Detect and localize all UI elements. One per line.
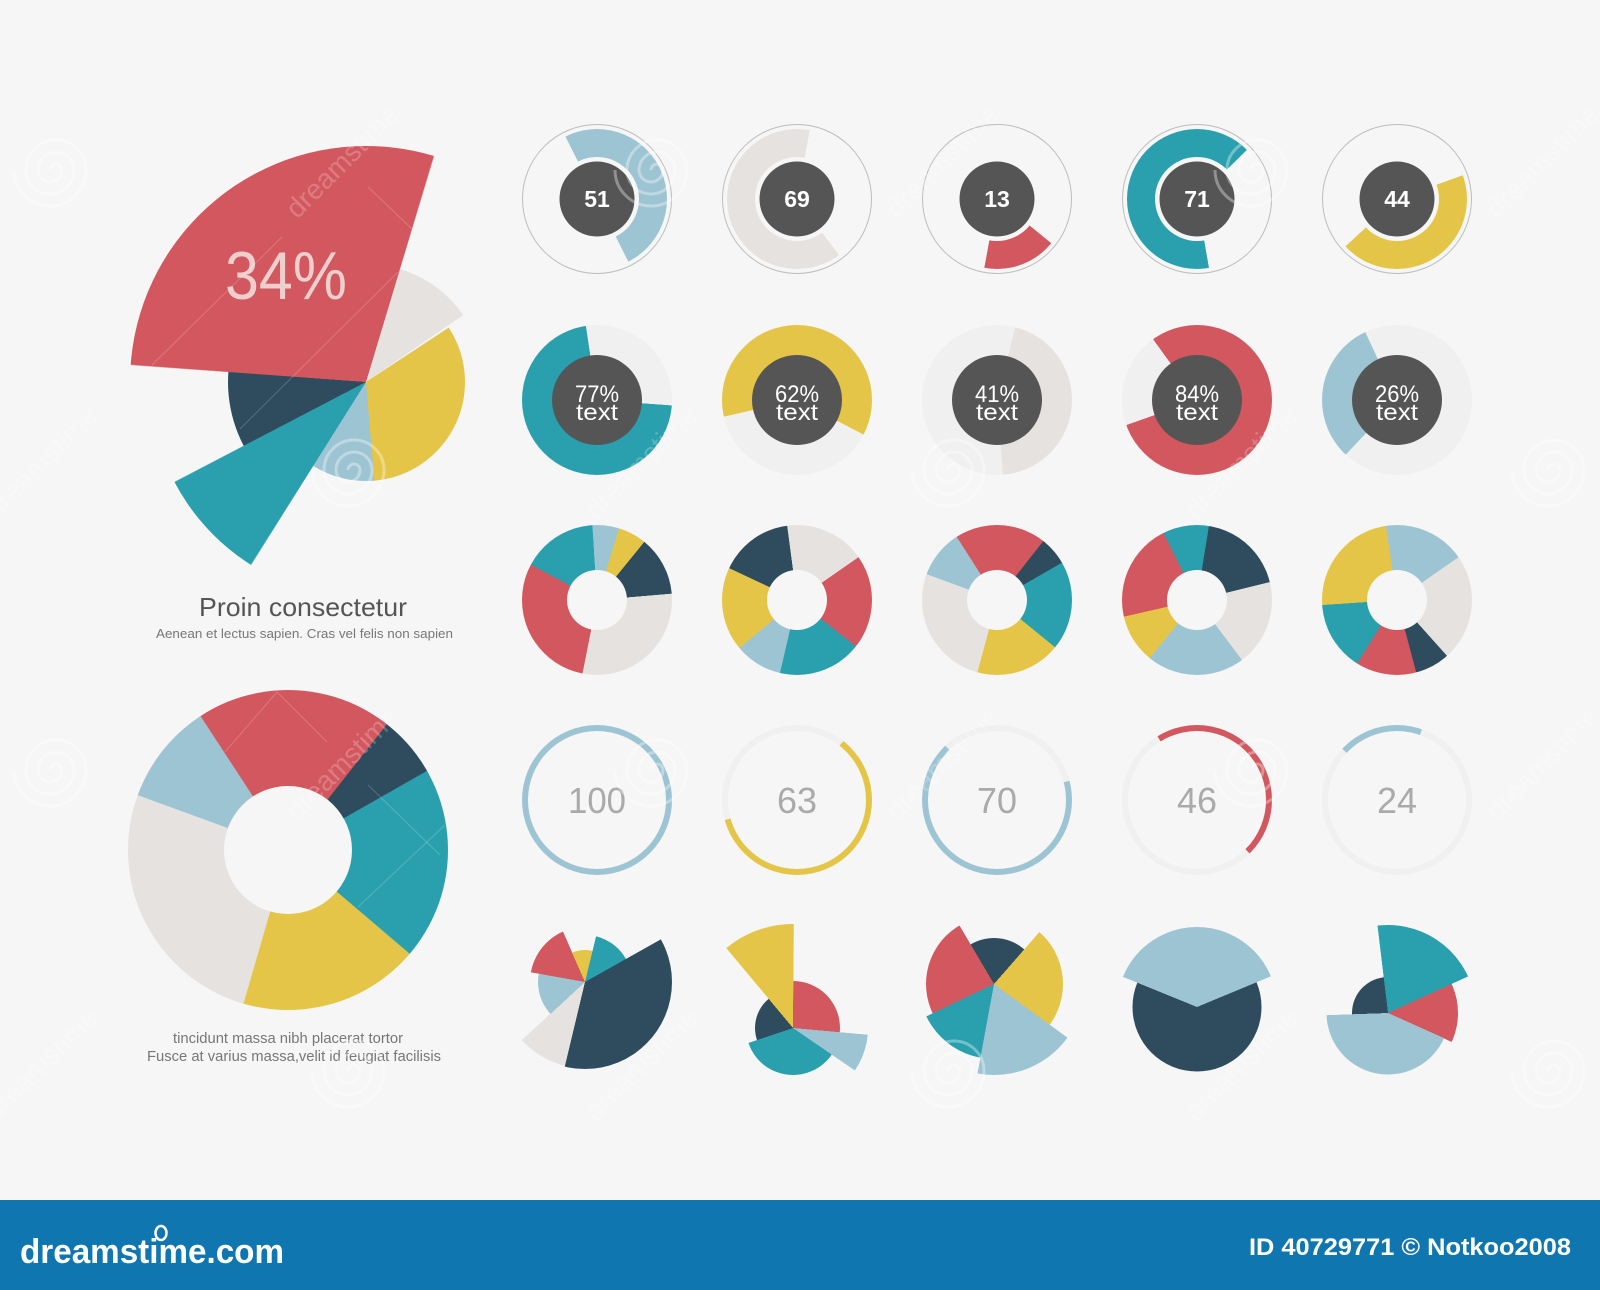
slice: navy xyxy=(128,690,448,1010)
gauge: 41% text: 41% xyxy=(975,381,1019,408)
thin gauge: 70 xyxy=(922,746,1072,875)
gauge: 44: 44 xyxy=(1384,186,1410,212)
exploded pie 3 xyxy=(926,926,1068,1075)
gauge: 62% text: text xyxy=(776,399,819,425)
subheading: Aenean et lectus sapien. Cras vel felis non sapien xyxy=(156,626,453,641)
thin gauge: 100: 100 xyxy=(568,780,626,821)
gauge: 62% text xyxy=(722,325,872,445)
thin gauge: 100 xyxy=(522,725,672,875)
watermark: text xyxy=(0,99,1600,1127)
watermark: text: dreamstime xyxy=(1179,400,1304,525)
gauge: 51: 51 xyxy=(584,186,610,212)
slice: yellow xyxy=(128,690,448,1010)
gauge: 77% text: text xyxy=(576,399,619,425)
exploded pie 5 xyxy=(1326,925,1468,1074)
gauge: 62% text: 62% xyxy=(775,381,819,408)
donut 4 xyxy=(1122,525,1272,675)
donut 2 xyxy=(722,525,872,675)
gauge: 26% text: text xyxy=(1376,399,1419,425)
slice: red xyxy=(128,690,448,1010)
gauge: 13 xyxy=(922,124,1072,274)
gauge: 51 xyxy=(522,124,672,274)
gauge: 69: 69 xyxy=(784,186,810,212)
footer bar xyxy=(0,1200,1600,1290)
watermark: text: dreamstime xyxy=(1179,1002,1304,1127)
gauge: 41% text xyxy=(952,328,1072,474)
chart: large donut xyxy=(128,690,448,1010)
heading: Proin consectetur: Proin consectetur xyxy=(199,592,407,622)
slice: navy xyxy=(228,244,504,520)
gauge: 71: 71 xyxy=(1184,186,1210,212)
exploded pie 1 xyxy=(522,932,672,1069)
gauge: 44 xyxy=(1322,124,1472,274)
thin gauge: 63 xyxy=(724,741,872,875)
gauge: 84% text xyxy=(1126,325,1272,475)
gauge: 13: 13 xyxy=(984,186,1010,212)
exploded pie 4 xyxy=(1123,927,1271,1072)
watermark: text: dreamstime xyxy=(280,701,405,826)
caption line 2: Fusce at varius massa,velit id feugiat facilisis xyxy=(147,1049,441,1065)
gauge: 26% text: 26% xyxy=(1375,381,1419,408)
thin gauge: 46 xyxy=(1158,725,1272,854)
donut 3 xyxy=(922,525,1072,675)
exploded pie 2 xyxy=(726,924,868,1075)
thin gauge: 24 xyxy=(1342,725,1422,821)
donut 1 xyxy=(522,525,672,675)
gauge: 71 xyxy=(1122,124,1272,274)
footer logo: dreamstime.com xyxy=(20,1233,284,1271)
watermark: text: dreamstime xyxy=(880,99,1005,224)
slice: red xyxy=(130,146,602,618)
gauge: 84% text: 84% xyxy=(1175,381,1219,408)
gauge: 26% text xyxy=(1322,332,1442,455)
watermark: text: dreamstime xyxy=(880,701,1005,826)
gauge: 77% text xyxy=(522,326,672,475)
watermark: diagonal lines xyxy=(152,187,445,907)
footer id: ID 40729771 © Notkoo2008 xyxy=(1249,1234,1571,1261)
gauge: 41% text: text xyxy=(976,399,1019,425)
thin gauge: 70: 70 xyxy=(977,780,1017,821)
thin gauge: 24: 24 xyxy=(1377,780,1417,821)
watermark: text: dreamstime xyxy=(579,1002,704,1127)
donut hole xyxy=(224,786,352,914)
watermark: spirals xyxy=(14,140,1584,1107)
chart: main exploded pie xyxy=(130,146,465,565)
thin gauge: 46: 46 xyxy=(1177,780,1217,821)
slice: beige xyxy=(248,264,484,500)
slice: yellow xyxy=(267,283,465,481)
slice: teal xyxy=(128,690,448,1010)
footer spiral icon xyxy=(156,1226,166,1240)
slice: beige xyxy=(128,690,448,1010)
gauge: 84% text: text xyxy=(1176,399,1219,425)
caption line 1: tincidunt massa nibh placerat tortor xyxy=(173,1031,403,1047)
slice: teal xyxy=(150,166,582,598)
gauge: 77% text: 77% xyxy=(575,381,619,408)
value: 34%: 34% xyxy=(225,238,347,314)
slice: blue xyxy=(128,690,448,1010)
thin gauge: 63: 63 xyxy=(777,780,817,821)
gauge: 69 xyxy=(722,124,872,274)
slice: blue xyxy=(267,283,465,481)
donut 5 xyxy=(1322,525,1472,675)
watermark: text: dreamstime xyxy=(280,99,405,224)
watermark: text: dreamstime xyxy=(579,400,704,525)
